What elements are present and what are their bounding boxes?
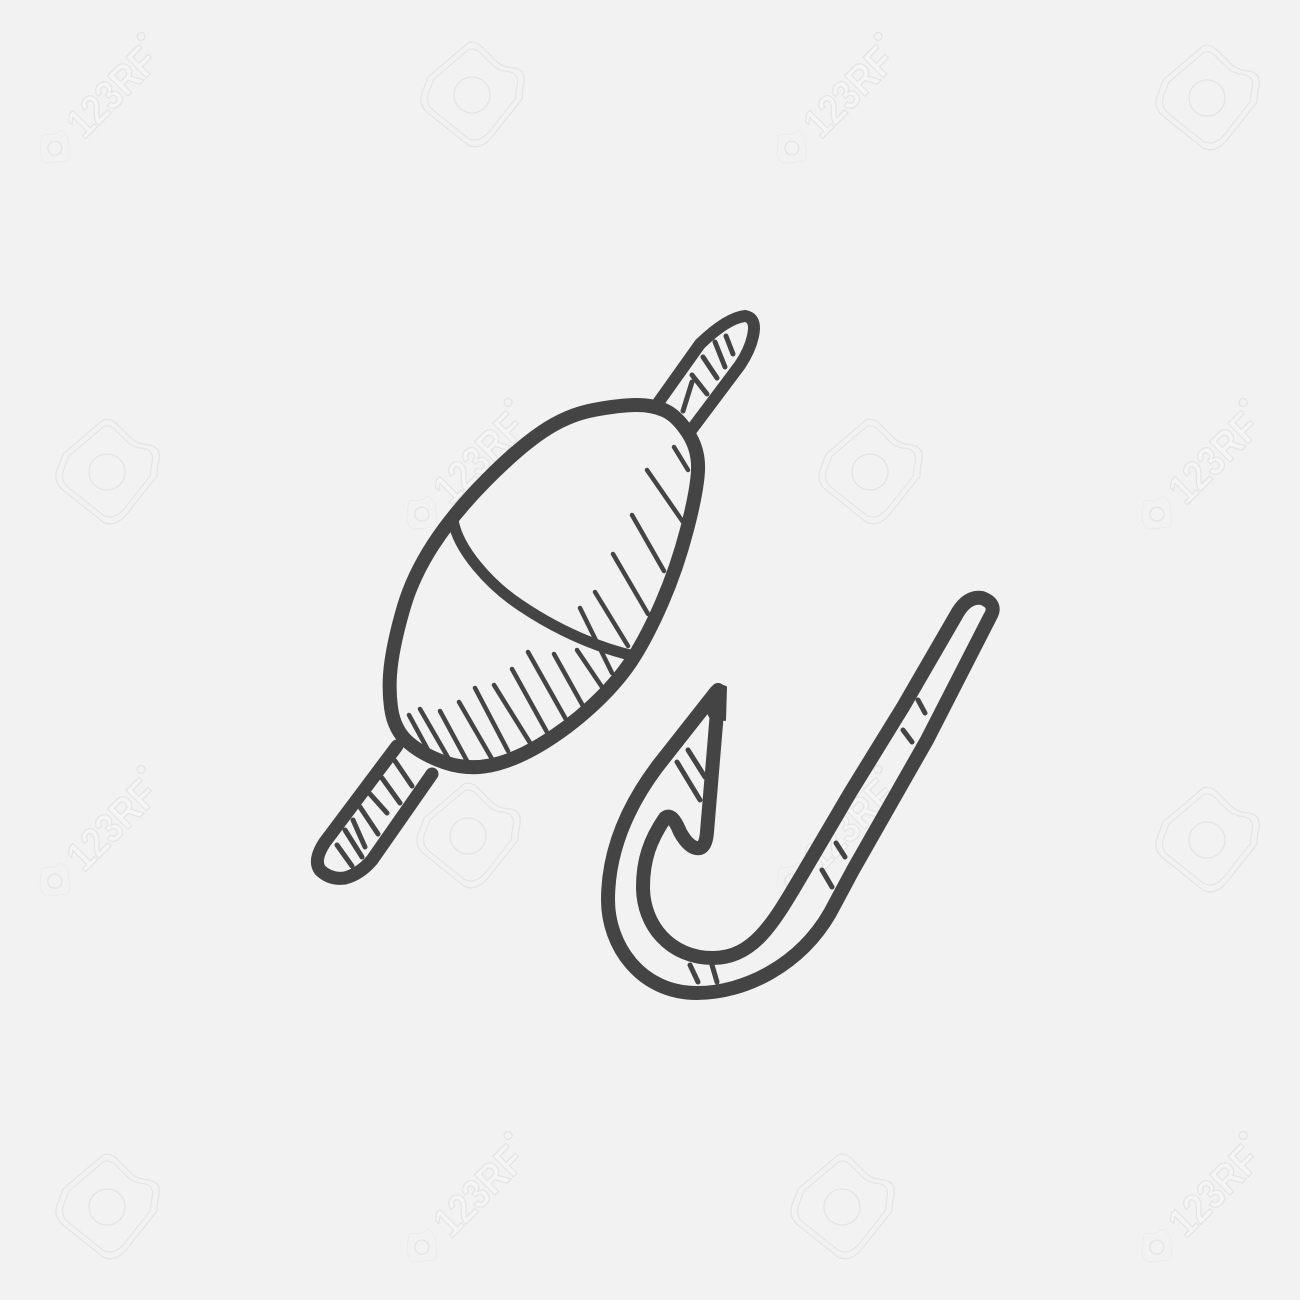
hook outline	[608, 598, 993, 993]
watermark logo row 4 right	[791, 1154, 894, 1259]
watermark text row 1 left	[26, 30, 174, 177]
float bottom stick	[317, 746, 432, 878]
float top stick	[658, 316, 754, 429]
watermark logo row 1 right	[1156, 45, 1259, 150]
watermark text row 2 right	[1128, 396, 1276, 543]
watermark text row 3 left: 123RF	[57, 770, 167, 880]
watermark text row 1 left: 123RF	[57, 37, 167, 147]
hook tip fill	[703, 684, 726, 720]
icon: fishing float	[317, 316, 754, 878]
watermark logo row 1 left	[421, 42, 524, 147]
watermark text row 2 right: 123RF	[1159, 403, 1269, 513]
hook hatching	[677, 700, 925, 982]
watermark logo row 2 right	[819, 419, 922, 524]
float colour band curve	[453, 520, 634, 656]
bottom stick hatching	[337, 761, 412, 866]
watermark text row 4 left: 123RF	[424, 1136, 534, 1246]
watermark logo row 4 left	[56, 1154, 159, 1259]
watermark logo row 3 right	[1156, 787, 1259, 892]
watermark logo row 2 left	[56, 419, 159, 524]
float body hatching	[409, 447, 688, 761]
watermark text row 3 right	[763, 763, 911, 910]
watermark text row 1 right: 123RF	[794, 37, 904, 147]
watermark text row 3 left	[26, 763, 174, 910]
watermark text row 3 right: 123RF	[794, 770, 904, 880]
watermark text row 4 left	[393, 1129, 541, 1276]
watermark text row 2 left: 123RF	[424, 403, 534, 513]
watermark text row 2 left	[393, 396, 541, 543]
watermark text row 4 right	[1128, 1129, 1276, 1276]
watermark text row 1 right	[763, 30, 911, 177]
float body outline	[390, 405, 698, 767]
watermark logo row 3 left	[417, 783, 520, 888]
watermark text row 4 right: 123RF	[1159, 1136, 1269, 1246]
icon: fishing hook	[608, 598, 993, 993]
top stick hatching	[683, 336, 733, 411]
